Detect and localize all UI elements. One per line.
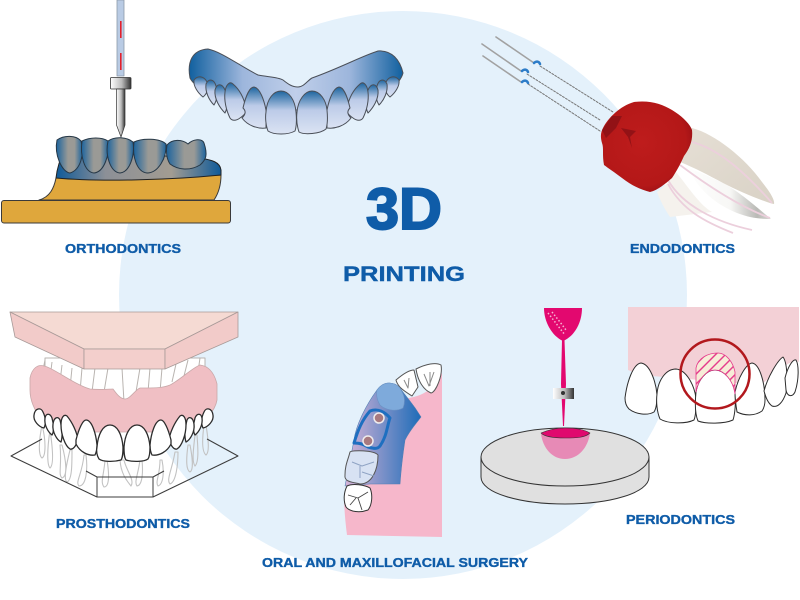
label: oral and maxillofacial surgery: ORAL AND MAXILLOFACIAL SURGERY (262, 556, 529, 570)
panel: endodontics illustration (482, 37, 774, 233)
label: orthodontics: ORTHODONTICS (65, 242, 181, 256)
guide raised pad (377, 383, 404, 410)
panel: 3D printed disc with printer head (481, 308, 649, 504)
denture teeth right (150, 409, 213, 455)
upper base block (10, 312, 238, 369)
panel: prosthodontics illustration (10, 312, 238, 497)
lower platform (11, 439, 238, 497)
disc (481, 457, 649, 504)
aligner gum band (189, 49, 403, 110)
print supports upper (42, 358, 205, 402)
printed pink bowl (541, 429, 590, 459)
print head (544, 308, 582, 341)
denture central teeth (97, 425, 150, 461)
icon: printing needle (110, 0, 131, 137)
plaster model (39, 175, 221, 200)
lens holder (553, 388, 574, 399)
panel: periodontics illustration (625, 307, 799, 423)
panel: oral and maxillofacial surgery illustration (344, 364, 442, 537)
denture gum (30, 365, 217, 432)
base plate (2, 200, 230, 223)
aligner teeth left side (194, 77, 266, 128)
endodontic files (482, 37, 613, 131)
mucosa (344, 373, 442, 537)
gum of model (56, 150, 221, 180)
periodontal teeth (625, 357, 798, 423)
tooth roots (657, 128, 774, 233)
graft area hatch (696, 353, 735, 394)
upper front teeth (396, 364, 441, 396)
surgical guide (345, 383, 421, 486)
label: endodontics: ENDODONTICS (630, 242, 735, 256)
background circle (119, 11, 687, 579)
print supports lower (39, 425, 208, 487)
aligner teeth right side (327, 77, 399, 128)
root canals (668, 142, 772, 233)
label: prosthodontics: PROSTHODONTICS (56, 517, 190, 531)
title: 3D: 3D (366, 177, 442, 242)
model teeth (56, 136, 206, 173)
denture teeth left (34, 409, 97, 455)
premolar under guide (345, 451, 378, 484)
red highlight ring (680, 340, 750, 408)
gum background (628, 307, 799, 385)
molar (344, 485, 372, 512)
title: PRINTING: PRINTING (343, 263, 465, 286)
aligner central teeth (266, 91, 327, 134)
panel: orthodontics illustration (2, 0, 230, 223)
label: periodontics: PERIODONTICS (626, 513, 735, 527)
panel: clear aligner (189, 49, 403, 134)
guide frame with drill sleeves (354, 410, 390, 448)
3D printed endo guide (601, 101, 692, 192)
laser beam (561, 340, 566, 426)
